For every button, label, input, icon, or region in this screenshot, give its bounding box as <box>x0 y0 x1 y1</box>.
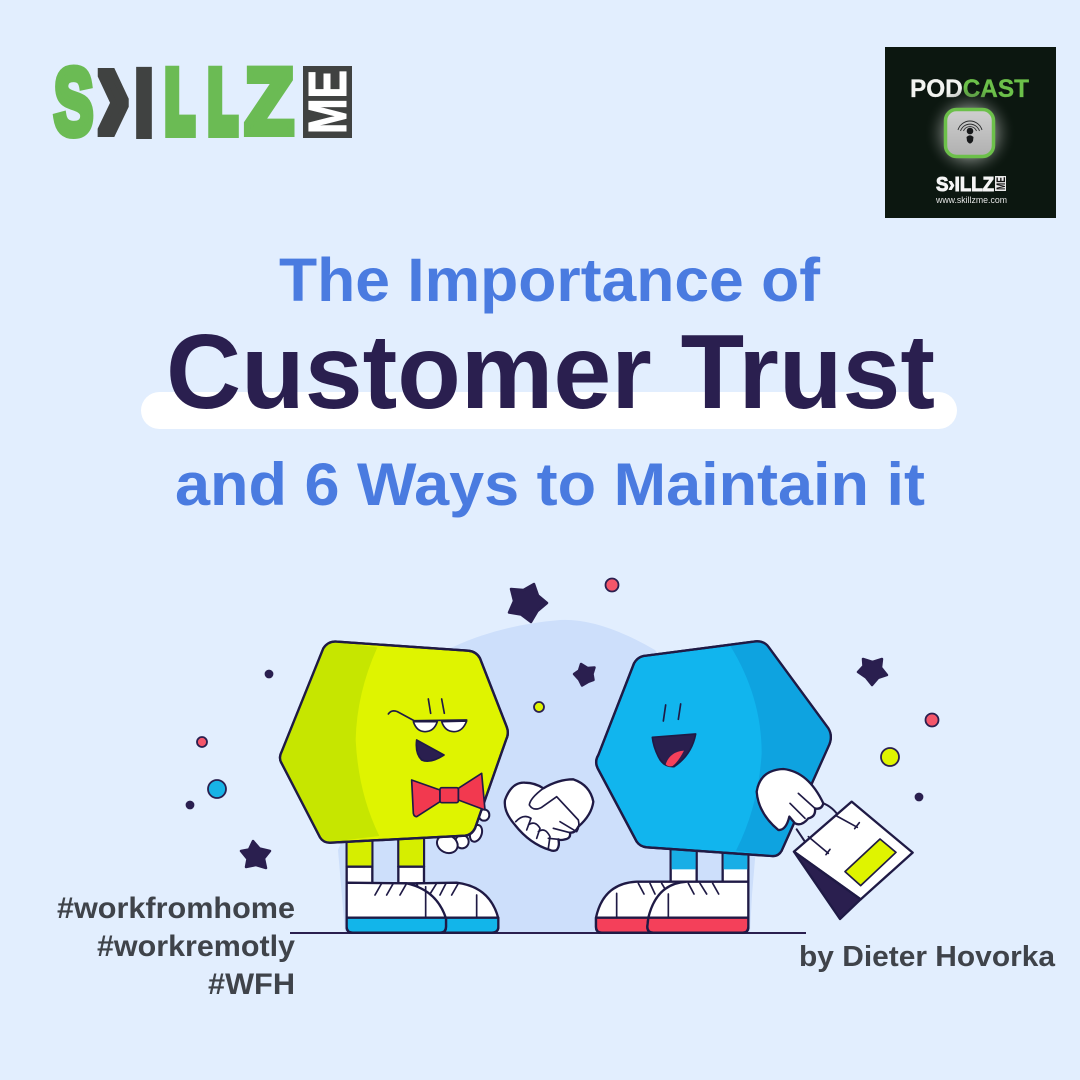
hand behind body <box>434 809 489 856</box>
hashtag 1: #workfromhome <box>57 892 295 925</box>
podcast badge <box>885 47 1056 218</box>
small logo: ME <box>994 177 1008 190</box>
highlight pill <box>141 392 957 429</box>
website: www.skillzme.com <box>935 195 1007 206</box>
logo: SKILLZ ME: L <box>166 56 193 150</box>
hand holding bag <box>757 769 823 830</box>
title line 3: and 6 Ways to Maintain it <box>175 451 925 518</box>
logo: SKILLZ ME: S <box>54 49 93 154</box>
logo: SKILLZ ME <box>54 3 358 176</box>
face <box>388 699 467 761</box>
title <box>141 246 957 518</box>
illustration <box>186 578 938 933</box>
bow tie <box>412 773 485 817</box>
legs <box>347 838 424 883</box>
hashtag 3: #WFH <box>208 968 295 1001</box>
body <box>280 642 508 843</box>
hashtag 2: #workremotly <box>97 930 296 963</box>
body shade <box>730 642 831 856</box>
ground line <box>290 932 806 934</box>
face <box>652 704 696 767</box>
body shade <box>280 642 379 842</box>
small logo: S›ILLZ <box>936 174 994 196</box>
title line 2: Customer Trust <box>166 313 935 431</box>
back shoe <box>417 883 498 933</box>
front shoe <box>347 883 446 933</box>
logo: SKILLZ ME: I <box>137 56 151 150</box>
logo: SKILLZ ME: › <box>96 3 131 176</box>
logo: SKILLZ ME: ME <box>298 70 358 134</box>
logo: SKILLZ ME: L <box>209 56 236 150</box>
handshake heart <box>505 779 593 851</box>
logo: SKILLZ ME: Z <box>245 50 293 153</box>
podcast heading: PODCAST <box>910 75 1029 103</box>
legs <box>671 847 748 882</box>
shopping bag <box>794 802 913 919</box>
stars <box>241 584 887 868</box>
title line 1: The Importance of <box>279 246 821 314</box>
character: blue hexagon with bag <box>596 641 913 933</box>
body <box>596 641 831 856</box>
character: green hexagon <box>280 642 508 933</box>
confetti dots <box>186 578 938 808</box>
back shoe <box>596 882 687 933</box>
front shoe <box>647 882 748 933</box>
byline: by Dieter Hovorka <box>799 941 1056 973</box>
icon: podcast button <box>946 110 994 156</box>
background blob <box>338 620 760 932</box>
hashtags <box>57 892 296 1001</box>
